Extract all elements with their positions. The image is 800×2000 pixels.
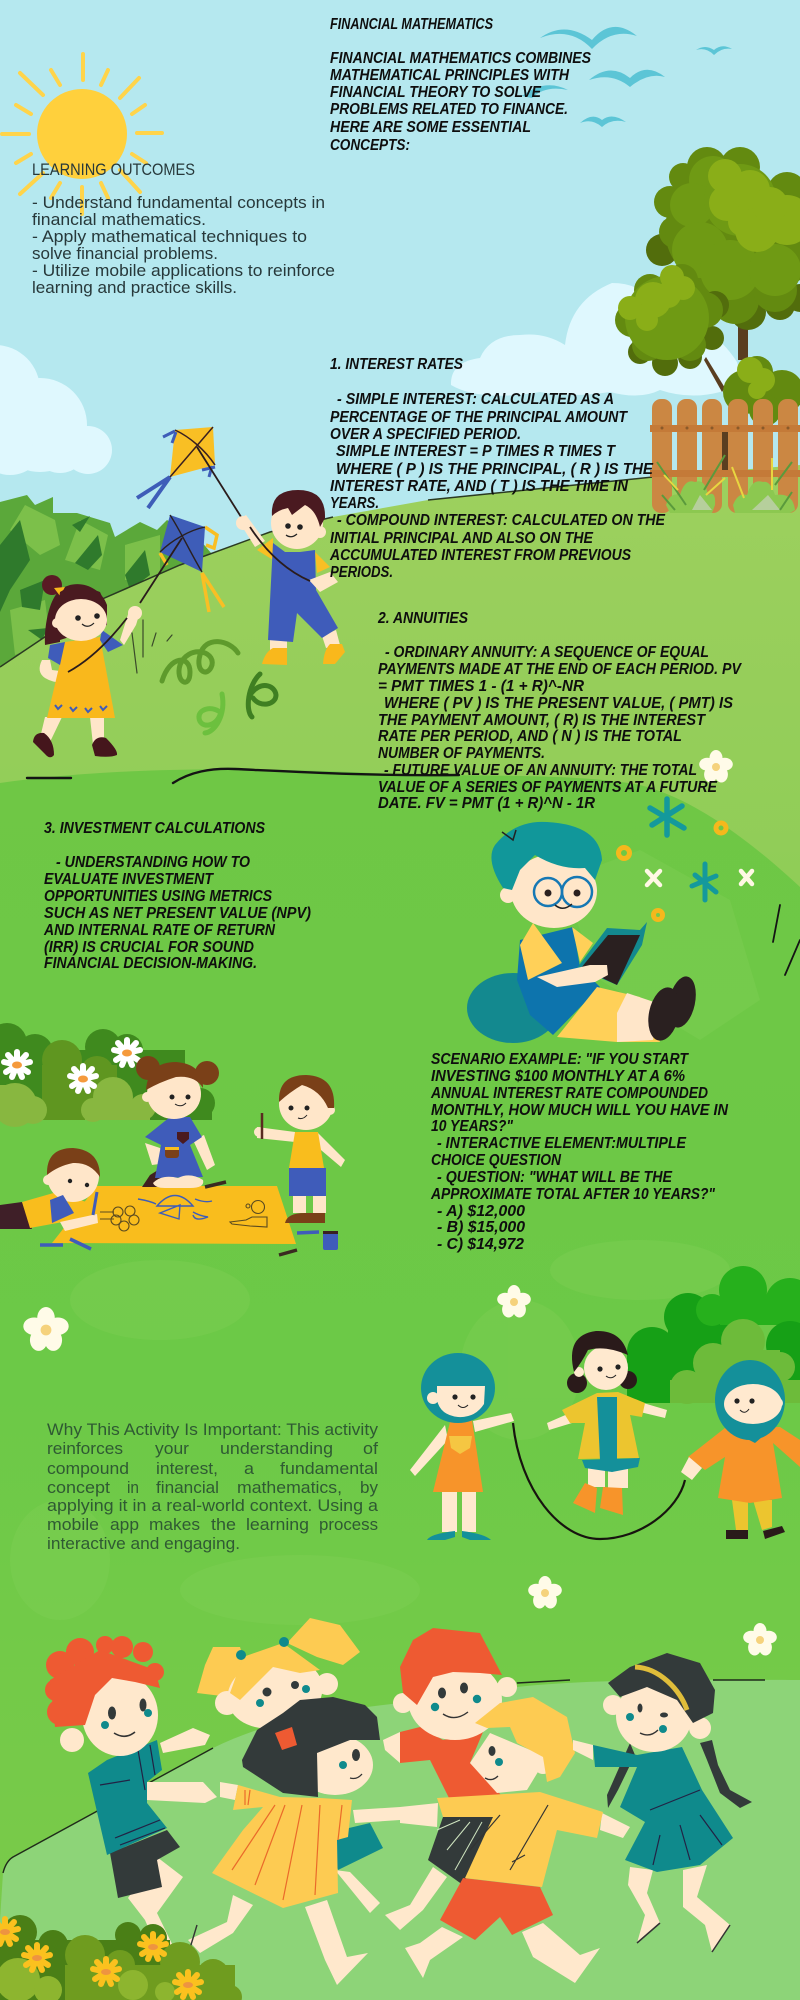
bush: left middle (0, 1023, 215, 1127)
why this activity is important text: makes (149, 1515, 200, 1534)
interest rates text: - SIMPLE INTEREST: CALCULATED AS A (337, 391, 614, 408)
learning outcomes text: - Understand fundamental concepts in (32, 193, 325, 212)
lying boy (0, 1148, 100, 1231)
learning outcomes text (32, 160, 335, 297)
why this activity is important text: Why This Activity Is Important: This activity (47, 1420, 379, 1439)
investment calculations text: AND INTERNAL RATE OF RETURN (43, 922, 275, 939)
scenario example text: - QUESTION: "WHAT WILL BE THE (437, 1169, 673, 1186)
why this activity is important text: the (211, 1515, 236, 1534)
girl: teal hair (410, 1353, 514, 1540)
why this activity is important text: of (363, 1439, 378, 1458)
scenario example text: INVESTING $100 MONTHLY AT A 6% (431, 1068, 685, 1085)
why this activity is important text: app (110, 1515, 139, 1534)
annuities text: WHERE ( PV ) IS THE PRESENT VALUE, ( PMT) IS (384, 695, 733, 712)
why this activity is important text: interactive and engaging. (47, 1534, 240, 1553)
why this activity is important text: concept (47, 1478, 110, 1497)
why this activity is important text: your (155, 1439, 189, 1458)
annuities text: PAYMENTS MADE AT THE END OF EACH PERIOD. PV (378, 661, 742, 678)
flowers: middle (23, 1285, 531, 1351)
scenario example text: - A) $12,000 (437, 1203, 525, 1220)
annuities text: - FUTURE VALUE OF AN ANNUITY: THE TOTAL (384, 762, 697, 779)
why this activity is important text: mobile (47, 1515, 99, 1534)
children drawing on mat (0, 1056, 345, 1255)
why this activity is important text: interest, (156, 1459, 218, 1478)
girl with buns (136, 1056, 219, 1188)
annuities text: DATE. FV = PMT (1 + R)^N - 1R (378, 795, 595, 812)
scenario example text: MONTHLY, HOW MUCH WILL YOU HAVE IN (431, 1102, 728, 1119)
annuities text: VALUE OF A SERIES OF PAYMENTS AT A FUTURE (378, 779, 718, 796)
scenario example text: 10 YEARS?" (431, 1118, 513, 1135)
scenario example text: CHOICE QUESTION (431, 1152, 561, 1169)
fence (650, 399, 800, 513)
why this activity is important text: understanding (220, 1439, 333, 1458)
doodles on mat (100, 1196, 267, 1231)
drawing mat (52, 1186, 296, 1244)
learning outcomes text: - Utilize mobile applications to reinforce (32, 261, 335, 280)
learning outcomes text: LEARNING OUTCOMES (32, 160, 195, 179)
flower near annuities (699, 750, 733, 782)
brush strokes (27, 769, 800, 975)
annuities text: THE PAYMENT AMOUNT, ( R) IS THE INTEREST (378, 712, 706, 729)
interest rates text: YEARS. (330, 495, 379, 512)
interest rates text: INITIAL PRINCIPAL AND ALSO ON THE (330, 530, 594, 547)
why this activity is important text: fundamental (280, 1459, 378, 1478)
learning outcomes text: - Apply mathematical techniques to (32, 227, 307, 246)
child: red shirt (383, 1628, 517, 1930)
title and intro text: FINANCIAL MATHEMATICS (330, 16, 493, 33)
interest rates text: 1. INTEREST RATES (330, 356, 463, 373)
scenario example text: - INTERACTIVE ELEMENT:MULTIPLE (437, 1135, 687, 1152)
hill: upper meadow (0, 465, 800, 1000)
why this activity is important text: reinforces (47, 1439, 123, 1458)
scenario example text: ANNUAL INTEREST RATE COMPOUNDED (430, 1085, 708, 1102)
standing boy (254, 1075, 345, 1223)
investment calculations text: 3. INVESTMENT CALCULATIONS (44, 820, 265, 837)
investment calculations text: SUCH AS NET PRESENT VALUE (NPV) (44, 905, 311, 922)
annuities text: = PMT TIMES 1 - (1 + R)^-NR (378, 678, 584, 695)
title and intro text (330, 16, 591, 154)
cloud: left (0, 345, 112, 475)
interest rates text: INTEREST RATE, AND ( T ) IS THE TIME IN (330, 478, 628, 495)
bushes: left of kites (0, 495, 217, 680)
annuities text: 2. ANNUITIES (377, 610, 468, 627)
title and intro text: CONCEPTS: (330, 137, 410, 154)
annuities text: NUMBER OF PAYMENTS. (378, 745, 545, 762)
interest rates text: ACCUMULATED INTEREST FROM PREVIOUS (329, 547, 631, 564)
sky background (0, 0, 800, 800)
girl: teal hijab (681, 1360, 800, 1539)
annuities text (377, 610, 742, 812)
bush: right of jump rope (627, 1266, 800, 1404)
child: braid, teal dress (573, 1653, 752, 1952)
why this activity is important text: applying it in a real-world context. Using a (47, 1496, 379, 1515)
interest rates text: - COMPOUND INTEREST: CALCULATED ON THE (337, 512, 666, 529)
child: pigtails (197, 1618, 383, 1913)
background mottling (10, 850, 760, 1625)
why this activity is important text (47, 1420, 379, 1553)
paint cup and crayons (40, 1182, 338, 1255)
interest rates text: PERIODS. (330, 564, 393, 581)
title and intro text: FINANCIAL MATHEMATICS COMBINES (330, 50, 591, 67)
hill: bottom meadow (0, 1680, 800, 2000)
scenario example text (430, 1051, 728, 1253)
circle of children (45, 1618, 752, 1985)
why this activity is important text: compound (47, 1459, 129, 1478)
why this activity is important text: financial (156, 1478, 219, 1497)
child: black hair, yellow dress (180, 1697, 400, 1985)
decorations around reading boy (618, 799, 752, 920)
reading boy (467, 822, 700, 1044)
child: blonde, red shorts (400, 1697, 630, 1983)
hill: lower meadow (0, 769, 800, 2000)
child: red hair, teal shirt (45, 1636, 217, 1955)
bush: bottom left (0, 1915, 242, 2000)
scenario example text: APPROXIMATE TOTAL AFTER 10 YEARS?" (430, 1186, 715, 1203)
why this activity is important text: learning (246, 1515, 309, 1534)
girl: yellow cardigan (547, 1331, 667, 1515)
investment calculations text: EVALUATE INVESTMENT (44, 871, 214, 888)
scenario example text: - B) $15,000 (437, 1219, 525, 1236)
annuities text: - ORDINARY ANNUITY: A SEQUENCE OF EQUAL (385, 644, 709, 661)
investment calculations text (43, 820, 311, 972)
title and intro text: MATHEMATICAL PRINCIPLES WITH (330, 67, 569, 84)
tree (615, 147, 800, 495)
jump rope (513, 1423, 685, 1539)
icon: birds (522, 27, 732, 127)
kite: yellow (137, 427, 243, 520)
why this activity is important text: in (127, 1478, 139, 1497)
why this activity is important text: by (360, 1478, 378, 1497)
scenario example text: SCENARIO EXAMPLE: "IF YOU START (431, 1051, 689, 1068)
interest rates text: WHERE ( P ) IS THE PRINCIPAL, ( R ) IS THE (336, 461, 654, 478)
investment calculations text: FINANCIAL DECISION-MAKING. (44, 955, 257, 972)
boy with kite (236, 490, 345, 665)
kite: blue (140, 515, 224, 612)
title and intro text: FINANCIAL THEORY TO SOLVE (330, 84, 542, 101)
scenario example text: - C) $14,972 (437, 1236, 524, 1253)
icon: sun (2, 54, 162, 214)
learning outcomes text: financial mathematics. (32, 210, 206, 229)
learning outcomes text: learning and practice skills. (32, 278, 237, 297)
interest rates text: OVER A SPECIFIED PERIOD. (330, 426, 521, 443)
why this activity is important text: a (244, 1459, 255, 1478)
grass swirls (132, 620, 276, 733)
title and intro text: PROBLEMS RELATED TO FINANCE. (330, 101, 568, 118)
interest rates text: SIMPLE INTEREST = P TIMES R TIMES T (336, 443, 616, 460)
learning outcomes text: solve financial problems. (32, 244, 218, 263)
investment calculations text: - UNDERSTANDING HOW TO (56, 854, 250, 871)
cloud: right (451, 283, 739, 396)
why this activity is important text: process (319, 1515, 378, 1534)
interest rates text (329, 356, 666, 581)
title and intro text: HERE ARE SOME ESSENTIAL (330, 119, 531, 136)
flowers: lower (528, 1576, 777, 1656)
annuities text: RATE PER PERIOD, AND ( N ) IS THE TOTAL (378, 728, 682, 745)
girl with kite (33, 575, 142, 757)
investment calculations text: OPPORTUNITIES USING METRICS (44, 888, 272, 905)
why this activity is important text: mathematics, (237, 1478, 342, 1497)
investment calculations text: (IRR) IS CRUCIAL FOR SOUND (44, 939, 254, 956)
interest rates text: PERCENTAGE OF THE PRINCIPAL AMOUNT (330, 409, 628, 426)
